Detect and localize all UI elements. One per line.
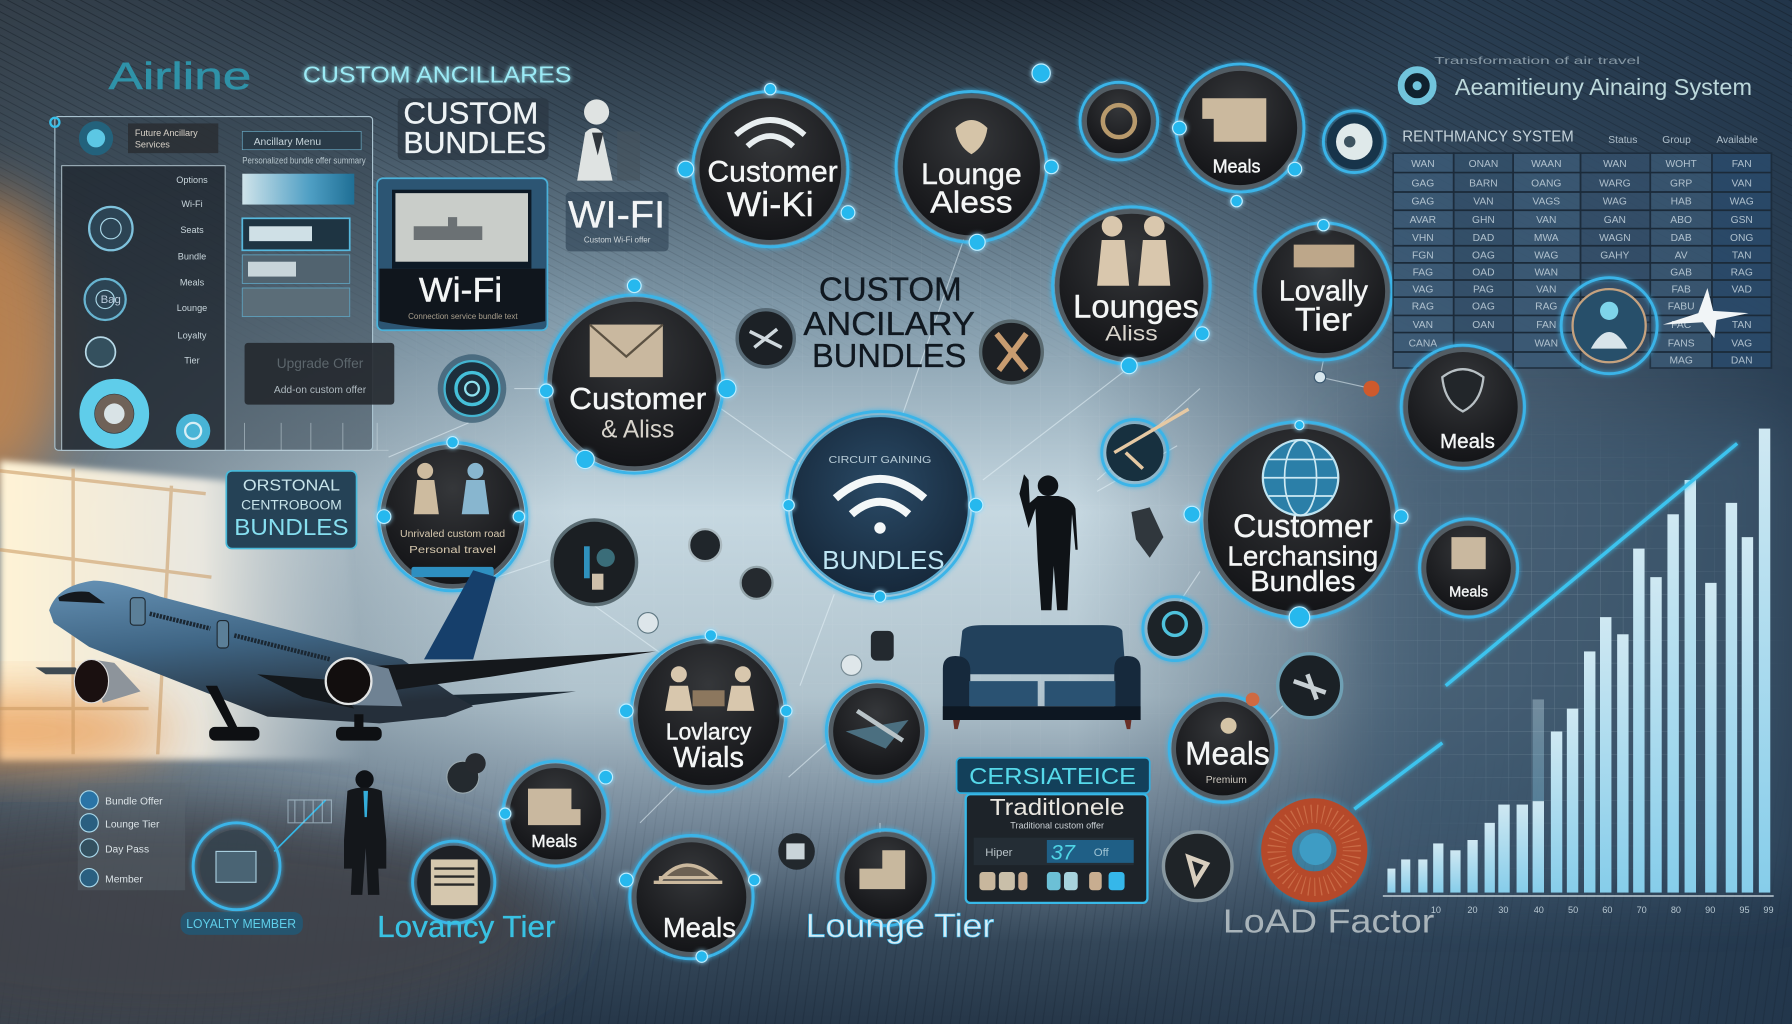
axis labels: 20 xyxy=(1467,905,1478,915)
panel: performance system table: OAG xyxy=(1472,250,1495,261)
icon: seat rack xyxy=(1294,245,1354,267)
heading: Custom Ancillary Bundles: CUSTOM xyxy=(819,272,962,309)
panel: performance system table: AV xyxy=(1675,250,1688,261)
axis labels: 40 xyxy=(1534,905,1544,915)
far engine xyxy=(74,659,141,703)
panel: performance system table: FGN xyxy=(1412,250,1434,261)
panel: chart xyxy=(1337,400,1792,915)
panel: performance system table: WAN xyxy=(1411,159,1435,170)
bars xyxy=(1387,429,1770,893)
circle: Customer Aliss xyxy=(539,279,736,473)
circle: Lovally Tier: Tier xyxy=(1295,301,1352,337)
circle: left people: Unrivaled custom road xyxy=(400,529,505,540)
panel: performance system table: GAHY xyxy=(1600,250,1630,261)
right column rows: Ancillary Menu xyxy=(254,137,321,148)
panel: performance system table: CANA xyxy=(1409,338,1437,349)
panel: performance system table: RAG xyxy=(1535,302,1557,313)
icon: man in suit xyxy=(344,770,386,895)
panel: performance system table: ONAN xyxy=(1469,159,1498,170)
price row: 37 xyxy=(1051,839,1076,864)
icon: three diners xyxy=(665,666,754,711)
panel: performance system table: DAD xyxy=(1473,233,1494,244)
panel: performance system table: WAN xyxy=(1534,338,1558,349)
circle: Customer Lerchansing Bundles: Bundles xyxy=(1250,566,1355,598)
circle: Meals top: Meals xyxy=(1213,156,1261,177)
circle: Lounge Aless xyxy=(896,91,1058,250)
circle: Lovally Tier xyxy=(1255,219,1392,360)
axis labels: 50 xyxy=(1568,905,1578,915)
icon: person badge over table xyxy=(1561,278,1657,374)
label: Lovancy Tier: Lovancy Tier xyxy=(377,909,555,944)
panel: performance system table xyxy=(1393,129,1771,368)
circle: document Lovalty xyxy=(413,841,495,923)
panel: performance system table: WAG xyxy=(1534,250,1558,261)
panel: performance system table: OANG xyxy=(1531,178,1561,189)
icon: target arrow circle xyxy=(1102,409,1189,486)
panel: performance system table: VAG xyxy=(1412,285,1433,296)
small icons: plane chips xyxy=(447,753,486,793)
header bar: CERSIATEICE xyxy=(969,763,1136,789)
circle: Customer Aliss: & Aliss xyxy=(601,416,674,444)
icon: spiral xyxy=(176,414,210,448)
header text: Future Ancillary xyxy=(135,128,198,138)
panel: performance system table: OAN xyxy=(1472,320,1495,331)
circle: left people: Personal travel xyxy=(409,545,496,556)
icon: tools circle xyxy=(981,321,1042,383)
circle: Meals center right: Meals xyxy=(1185,736,1270,772)
inner list panel xyxy=(62,166,225,450)
icon: monitor ring xyxy=(193,800,326,910)
icon: circle near sofa xyxy=(1143,597,1207,661)
panel: performance system table: FAC xyxy=(1671,320,1692,331)
panel: performance system table: WAGN xyxy=(1599,233,1631,244)
panel: Wi-Fi screen: Connection service bundle text xyxy=(408,312,518,321)
circle: left people xyxy=(377,437,527,591)
icon: meal bag xyxy=(1451,537,1486,569)
label: WI-FI xyxy=(566,192,669,251)
panel: performance system table: FAB xyxy=(1671,285,1691,296)
circle: Meals bottom: Meals xyxy=(663,912,736,943)
label box: personal bundles: CENTROBOOM xyxy=(241,498,342,513)
circle: Loyalty Wials xyxy=(619,630,792,792)
header text: Services xyxy=(135,139,170,149)
panel: performance system table: MWA xyxy=(1534,233,1559,244)
stabilizer xyxy=(451,691,576,706)
circle: Customer Lerchansing Bundles: Lerchansing xyxy=(1227,541,1378,572)
trend line xyxy=(1354,443,1737,809)
inner list panel: Seats xyxy=(180,225,204,235)
circle: Meals bottom-left xyxy=(499,761,613,866)
panel: Wi-Fi screen xyxy=(377,178,547,330)
chart outline xyxy=(245,423,389,450)
circle: Meals right: Meals xyxy=(1440,430,1495,453)
panel: performance system table: GSN xyxy=(1731,215,1753,226)
panel: performance system table: OAG xyxy=(1472,302,1495,313)
panel: performance system table: GAG xyxy=(1411,197,1434,208)
icon: header badge xyxy=(79,121,113,155)
panel: performance system table: DAN xyxy=(1731,355,1753,366)
icon: wifi xyxy=(736,120,805,146)
icon: standing man waving xyxy=(1019,474,1078,610)
circle: central Bundles: BUNDLES xyxy=(822,545,945,575)
circle: Lovally Tier: Lovally xyxy=(1279,276,1369,308)
icon: chart frame xyxy=(288,800,331,823)
right column rows: Personalized bundle offer summary xyxy=(242,155,366,165)
axis labels: 95 xyxy=(1739,905,1750,915)
icon: meal xyxy=(528,789,581,825)
circle: Meals small right: Meals xyxy=(1449,585,1488,601)
label: WI-FI: WI-FI xyxy=(568,193,665,235)
dark box xyxy=(245,343,394,405)
label: WI-FI: Custom Wi-Fi offer xyxy=(584,235,651,244)
panel: performance system table: OAD xyxy=(1472,267,1495,278)
panel: performance system table: Group xyxy=(1662,135,1691,146)
panel: performance system table: FABU xyxy=(1668,302,1695,313)
panel: performance system table: WAG xyxy=(1730,197,1754,208)
label: custom bundles: CUSTOM xyxy=(403,95,538,130)
label box: personal bundles xyxy=(226,471,357,549)
icon: lounge circle xyxy=(838,830,934,926)
inner list panel: Loyalty xyxy=(178,330,207,340)
panel: performance system table: RAG xyxy=(1731,267,1753,278)
panel: performance system table: VAG xyxy=(1731,338,1752,349)
icon: business people card xyxy=(577,99,640,181)
label: custom bundles: BUNDLES xyxy=(403,125,546,160)
panel: performance system table: WARG xyxy=(1599,178,1631,189)
panel: performance system table: FAN xyxy=(1732,159,1752,170)
inner list panel: Lounge xyxy=(177,303,207,313)
dark box: Add-on custom offer xyxy=(274,385,367,396)
icon: cloche xyxy=(654,865,722,882)
inner list panel: Tier xyxy=(184,355,200,365)
panel: performance system table: WAN xyxy=(1534,267,1558,278)
small dots and connector: orange node xyxy=(1314,371,1379,397)
panel: Traditional offer card: Traditlonele xyxy=(990,794,1125,820)
panel: performance system table: DAB xyxy=(1671,233,1692,244)
circle: Loyalty Wials: Wials xyxy=(673,742,744,774)
panel: bottom-left list: Day Pass xyxy=(105,845,149,856)
connector lines xyxy=(389,217,1371,846)
circle: Meals center right: Premium xyxy=(1206,775,1247,786)
panel: performance system table: TAN xyxy=(1732,320,1752,331)
icon: spark star xyxy=(1663,288,1749,338)
inner list panel: Bag xyxy=(101,294,121,306)
icon: globe xyxy=(1263,440,1338,515)
panel: performance system table: MAG xyxy=(1669,355,1693,366)
circle: Customer Wi-Ki: Customer xyxy=(707,156,838,189)
circle: Meals small right xyxy=(1419,519,1518,617)
circle: Lounge Aless: Lounge xyxy=(921,158,1022,191)
fuselage xyxy=(49,581,473,723)
panel: performance system table: WAN xyxy=(1603,159,1627,170)
icon: shield xyxy=(1442,369,1483,411)
circle: Loyalty Wials: Lovlarcy xyxy=(666,718,752,744)
small icon: connector chip xyxy=(1131,507,1163,558)
panel: performance system table: BARN xyxy=(1469,178,1498,189)
panel: performance system table: ABO xyxy=(1670,215,1692,226)
panel: performance system table: GAB xyxy=(1670,267,1692,278)
panel: performance system table: TAN xyxy=(1732,250,1752,261)
heading: Custom Ancillary Bundles: ANCILARY xyxy=(803,306,975,343)
label box: personal bundles: BUNDLES xyxy=(234,514,349,540)
panel: performance system table: VAD xyxy=(1732,285,1752,296)
panel: bottom-left list: Lounge Tier xyxy=(105,819,160,830)
axis labels: 30 xyxy=(1498,905,1508,915)
circle: central Bundles xyxy=(783,411,983,602)
panel: performance system table: FAN xyxy=(1536,320,1556,331)
circle: Customer Aliss: Customer xyxy=(569,381,706,416)
panel: performance system table: FAG xyxy=(1413,267,1433,278)
axis labels: 99 xyxy=(1763,905,1774,915)
panel: performance system table: RAG xyxy=(1412,302,1434,313)
far wing xyxy=(35,667,80,674)
circle: Lounges Aliss: Lounges xyxy=(1073,289,1199,325)
dark box: Upgrade Offer xyxy=(277,356,364,371)
icon: wifi xyxy=(835,479,925,534)
panel: performance system table: VHN xyxy=(1412,233,1434,244)
icon: spiral circle xyxy=(438,354,506,423)
donut xyxy=(1259,797,1369,906)
node: cyan dot xyxy=(1032,64,1050,82)
icon: sofa xyxy=(943,625,1141,729)
icon: plane circle xyxy=(826,681,927,782)
panel: bottom-left list: Bundle Offer xyxy=(105,797,163,808)
icon: meal tray xyxy=(1202,98,1266,142)
circle: Meals bottom-left: Meals xyxy=(531,831,577,851)
tail xyxy=(424,570,496,659)
chips xyxy=(979,872,1125,890)
landing gear xyxy=(206,686,382,741)
icon: donut gauge xyxy=(87,386,142,441)
panel: performance system table: VAN xyxy=(1732,178,1752,189)
panel: performance system table: GHN xyxy=(1472,215,1495,226)
label box: personal bundles: ORSTONAL xyxy=(243,477,340,494)
heading: performance system: RENTHMANCY SYSTEM xyxy=(1402,129,1574,146)
heading: Custom Ancillary Bundles: BUNDLES xyxy=(812,338,966,375)
icon: small circle left of title xyxy=(737,310,794,367)
panel: performance system table: Status xyxy=(1608,135,1637,146)
circle: Customer Wi-Ki xyxy=(678,83,855,247)
panel: performance system table: VAN xyxy=(1473,197,1494,208)
icon: small chevron circle xyxy=(1163,832,1232,901)
small dots cluster xyxy=(638,529,773,633)
circle: central Bundles: CIRCUIT GAINING xyxy=(829,455,931,466)
inner list panel: Meals xyxy=(180,278,205,288)
circle: Meals bottom xyxy=(619,835,760,962)
inner list panel: Wi-Fi xyxy=(181,199,203,209)
icon: tools circle right xyxy=(1278,654,1342,718)
title: Airline: Airline xyxy=(109,55,251,97)
near engine xyxy=(326,658,402,706)
label: loyalty capsule xyxy=(181,912,303,935)
icon: two seated people xyxy=(414,463,489,514)
panel: performance system table: PAG xyxy=(1473,285,1494,296)
icon: white blob circle xyxy=(1323,111,1385,173)
panel: performance system table: VAN xyxy=(1413,320,1433,331)
panel: bottom-left list: Member xyxy=(105,874,143,885)
price row: Hiper xyxy=(985,847,1013,859)
header: system logo xyxy=(1401,70,1433,102)
panel: performance system table: GAG xyxy=(1411,178,1434,189)
panel: Traditional offer card: Traditional custom offer xyxy=(1010,821,1104,831)
icon: small round ring xyxy=(1080,82,1158,160)
heading: custom ancillares: CUSTOM ANCILLARES xyxy=(303,61,571,87)
icon: two people xyxy=(1097,216,1170,286)
circle: Lounge Aless: Aless xyxy=(930,185,1013,220)
panel: performance system table: VAN xyxy=(1536,215,1556,226)
panel: bottom-left list xyxy=(78,783,185,890)
node: orange dot xyxy=(1246,693,1259,706)
near wing xyxy=(366,651,656,690)
cockpit xyxy=(58,591,105,603)
panel: performance system table: Available xyxy=(1716,135,1758,146)
header bar xyxy=(957,758,1150,793)
panel: performance system table: GAN xyxy=(1604,215,1626,226)
panel: performance system table: HAB xyxy=(1671,197,1692,208)
circle: Meals right xyxy=(1401,345,1525,469)
panel: performance system table: ONG xyxy=(1730,233,1753,244)
panel: performance system table: WAG xyxy=(1603,197,1627,208)
icon: envelope xyxy=(590,325,663,377)
panel: performance system table: WOHT xyxy=(1665,159,1698,170)
panel: performance system table: VAGS xyxy=(1532,197,1560,208)
small icon: tag chip xyxy=(778,833,815,870)
axis labels: 10 xyxy=(1431,905,1441,915)
small header captions: Transformation of air travel xyxy=(1434,56,1640,67)
icon: doc xyxy=(431,859,478,905)
small icon: camera chip xyxy=(841,631,894,675)
header text xyxy=(128,123,218,153)
panel: Traditional offer card xyxy=(957,758,1150,903)
heading: Custom Ancillary Bundles xyxy=(803,272,975,375)
panel: Wi-Fi screen: Wi-Fi xyxy=(419,272,502,310)
circle: Customer Wi-Ki: Wi-Ki xyxy=(727,186,814,224)
icon: lounge shield xyxy=(955,120,987,154)
panel: performance system table: VAN xyxy=(1536,285,1556,296)
panel: performance system table: WAAN xyxy=(1531,159,1561,170)
axis labels: 70 xyxy=(1637,905,1647,915)
panel: performance system table: AVAR xyxy=(1410,215,1436,226)
circle: Meals center right xyxy=(1169,695,1277,802)
plane xyxy=(35,570,656,741)
panel: performance system table: GRP xyxy=(1670,178,1692,189)
axis labels: 80 xyxy=(1671,905,1681,915)
circle: Customer Lerchansing Bundles xyxy=(1184,421,1408,627)
circle: Customer Lerchansing Bundles: Customer xyxy=(1233,508,1373,544)
panel: left dashboard xyxy=(50,117,394,450)
circle: Lounges Aliss xyxy=(1053,207,1210,374)
windows xyxy=(150,614,330,659)
circle: Lounges Aliss: Aliss xyxy=(1105,321,1158,346)
axis labels: 90 xyxy=(1705,905,1715,915)
inner list panel: Bundle xyxy=(178,251,206,261)
circle: Meals top xyxy=(1173,64,1304,207)
inner list panel: Options xyxy=(176,175,208,185)
icon: small luggage circle xyxy=(552,520,637,605)
label: Lounge Tier: Lounge Tier xyxy=(806,908,994,945)
price row xyxy=(974,838,1134,865)
price row: Off xyxy=(1094,847,1110,859)
label: load factor: LoAD Factor xyxy=(1223,904,1434,941)
axis labels: 60 xyxy=(1602,905,1612,915)
label: custom bundles xyxy=(398,95,549,160)
right column rows xyxy=(242,131,366,317)
icon: egg xyxy=(1221,718,1237,734)
heading: system title: Aeamitieuny Ainaing System xyxy=(1455,74,1752,100)
panel: performance system table: FANS xyxy=(1668,338,1695,349)
label: loyalty capsule: LOYALTY MEMBER xyxy=(186,917,296,931)
